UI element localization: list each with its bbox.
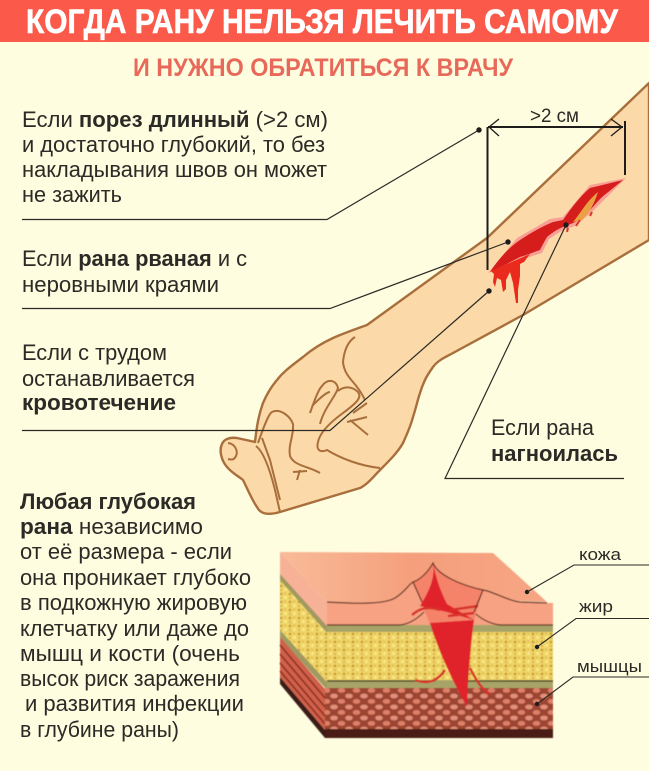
leader line: long cut [22, 127, 482, 220]
text: deep wound: мышц и кости (очень [20, 641, 240, 666]
label: muscles [535, 657, 649, 706]
leader line: bleeding [22, 288, 492, 430]
skin front [327, 582, 430, 625]
wound cavity [413, 563, 483, 625]
subtitle: И НУЖНО ОБРАТИТЬСЯ К ВРАЧУ [133, 54, 513, 82]
text: bleeding: останавливается [22, 366, 195, 391]
text: festering wound: нагноилась [491, 441, 618, 466]
label: fat: жир [579, 597, 613, 616]
illustration: arm with fist [221, 83, 649, 514]
text: bleeding [22, 340, 195, 415]
skin top surface [280, 552, 547, 603]
measurement: bracket with arrow [488, 106, 625, 270]
text: deep wound: от её размера - если [20, 539, 232, 564]
text: torn wound: Если рана рваная и с [22, 246, 247, 271]
text: long cut [22, 107, 328, 207]
text: deep wound: высок риск заражения [20, 666, 240, 691]
text: deep wound [20, 489, 251, 742]
illustration: skin layers cross-section [280, 552, 553, 738]
text: bleeding: кровотечение [22, 390, 176, 415]
hand detail lines [228, 337, 380, 512]
label: fat [535, 597, 649, 649]
text: deep wound: Любая глубокая [20, 489, 196, 514]
text: deep wound: и развития инфекции [25, 691, 244, 716]
text: torn wound: неровными краями [22, 272, 219, 297]
left side layers [280, 552, 327, 627]
text: deep wound: она проникает глубоко [20, 565, 251, 590]
text: deep wound: в глубине раны) [20, 717, 179, 742]
label: skin [525, 545, 649, 594]
fascia bands [327, 625, 553, 632]
leader line: festering wound [445, 222, 624, 479]
illustration: wound on the forearm [488, 178, 626, 303]
measurement label: >2 см [530, 106, 579, 127]
label: skin: кожа [579, 545, 622, 564]
text: long cut: Если порез длинный (>2 см) [22, 107, 328, 132]
text: long cut: не зажить [22, 182, 122, 207]
wound edge outline [327, 563, 547, 612]
front muscle layer [325, 688, 553, 729]
text: festering wound [491, 415, 618, 466]
text: festering wound: Если рана [491, 415, 595, 440]
text: long cut: и достаточно глубокий, то без [22, 132, 325, 157]
front fat layer [327, 632, 553, 682]
text: long cut: накладывания швов он может [22, 157, 327, 182]
text: deep wound: клетчатку или даже до [20, 616, 249, 641]
text: torn wound [22, 246, 247, 297]
text: deep wound: в подкожную жировую [20, 590, 247, 615]
text: bleeding: Если с трудом [22, 340, 167, 365]
wound wedge [420, 563, 474, 707]
label: muscles: мышцы [577, 657, 642, 676]
text: deep wound: рана независимо [20, 514, 203, 539]
leader line: torn wound [22, 239, 511, 308]
